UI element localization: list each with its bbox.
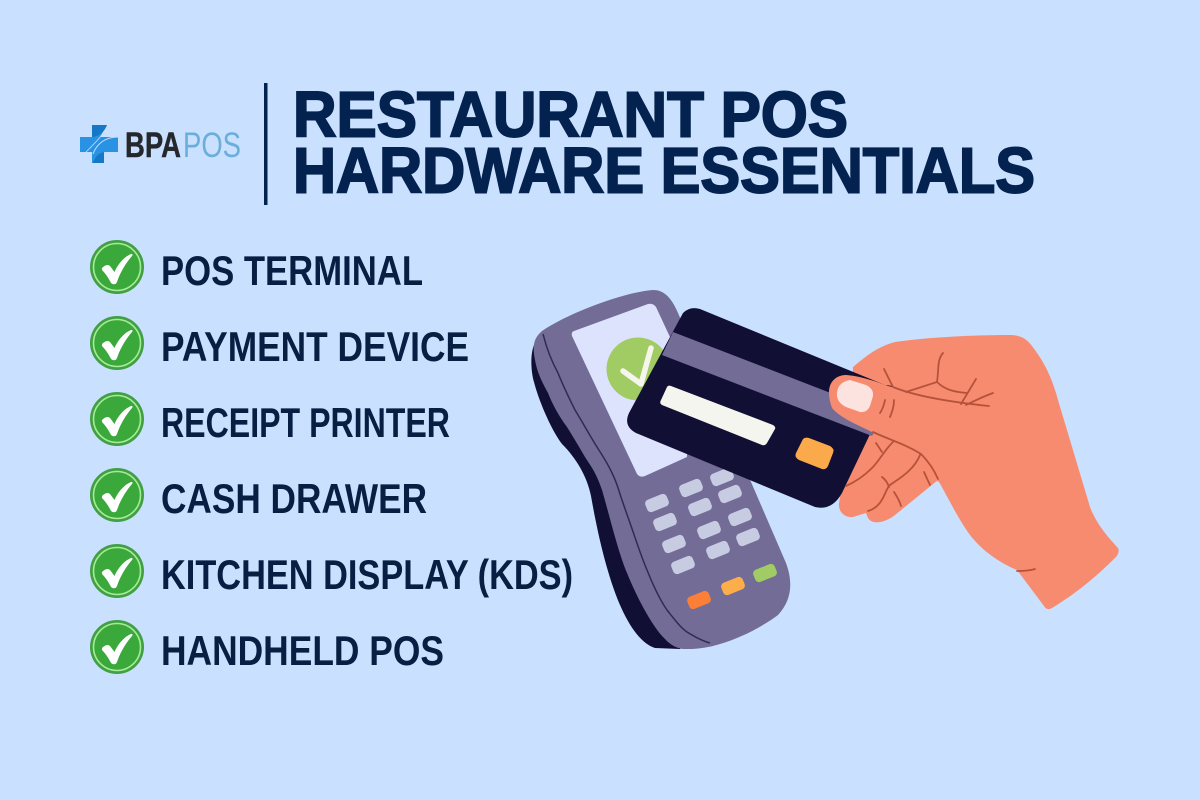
payment terminal <box>531 290 790 649</box>
title: HARDWARE ESSENTIALS <box>293 134 1035 206</box>
item: cash drawer <box>90 468 427 522</box>
item: handheld POS: HANDHELD POS <box>161 627 444 674</box>
item: POS terminal: POS TERMINAL <box>161 247 423 294</box>
card stripe <box>662 332 885 436</box>
hand <box>839 335 1119 609</box>
title: RESTAURANT POS <box>293 78 848 150</box>
card chip <box>795 438 834 469</box>
item: kitchen display: KITCHEN DISPLAY (KDS) <box>161 551 573 598</box>
card signature panel <box>660 386 775 445</box>
screen check badge <box>606 338 670 400</box>
item: handheld POS <box>90 620 444 674</box>
keypad <box>644 467 761 575</box>
credit card <box>627 308 893 508</box>
checklist <box>90 240 573 674</box>
crease lines <box>846 353 1035 571</box>
item: cash drawer: CASH DRAWER <box>161 475 427 522</box>
icon: medical cross <box>80 125 118 163</box>
thumb and hand creases <box>829 353 1035 571</box>
terminal screen <box>572 304 690 477</box>
illustration: card payment <box>531 290 1119 649</box>
logo wordmark <box>125 126 241 165</box>
item: kitchen display <box>90 544 573 598</box>
thumbnail <box>837 380 873 412</box>
item: payment device <box>90 316 469 370</box>
logo: BPA POS <box>80 125 241 165</box>
item: payment device: PAYMENT DEVICE <box>161 323 469 370</box>
logo wordmark: POS <box>183 126 241 165</box>
terminal buttons <box>686 563 778 610</box>
item: POS terminal <box>90 240 423 294</box>
item: receipt printer: RECEIPT PRINTER <box>161 399 450 446</box>
logo wordmark: BPA <box>125 126 181 165</box>
title <box>293 78 1035 206</box>
item: receipt printer <box>90 392 450 446</box>
